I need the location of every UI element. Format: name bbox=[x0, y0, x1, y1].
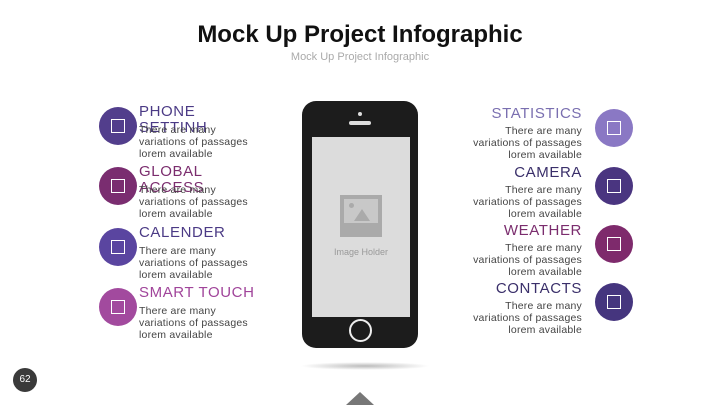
heading: CALENDER bbox=[139, 224, 226, 241]
text bbox=[473, 300, 582, 336]
text bbox=[473, 242, 582, 278]
icon: circle bbox=[595, 225, 633, 263]
text: lorem available bbox=[139, 269, 213, 281]
speaker bbox=[349, 121, 371, 125]
text: There are many bbox=[505, 125, 582, 137]
text bbox=[473, 125, 582, 161]
phone shadow bbox=[300, 362, 430, 370]
text: lorem available bbox=[139, 208, 213, 220]
text: variations of passages bbox=[473, 312, 582, 324]
item: global access bbox=[99, 163, 248, 220]
heading: SMART TOUCH bbox=[139, 284, 255, 301]
text: There are many bbox=[505, 300, 582, 312]
text: lorem available bbox=[508, 149, 582, 161]
icon: circle bbox=[595, 109, 633, 147]
item: camera bbox=[473, 164, 633, 220]
text: There are many bbox=[139, 124, 216, 136]
item: statistics bbox=[473, 105, 633, 161]
item: contacts bbox=[473, 280, 633, 336]
text: lorem available bbox=[508, 266, 582, 278]
heading: STATISTICS bbox=[492, 105, 582, 122]
text: There are many bbox=[139, 305, 216, 317]
text: variations of passages bbox=[473, 137, 582, 149]
text: There are many bbox=[139, 245, 216, 257]
text: variations of passages bbox=[139, 196, 248, 208]
icon: circle bbox=[595, 167, 633, 205]
text bbox=[139, 245, 248, 281]
text: variations of passages bbox=[473, 254, 582, 266]
text: There are many bbox=[505, 242, 582, 254]
text bbox=[473, 184, 582, 220]
text: lorem available bbox=[139, 148, 213, 160]
text: variations of passages bbox=[473, 196, 582, 208]
page number: 62 bbox=[19, 374, 31, 385]
text: lorem available bbox=[508, 208, 582, 220]
text bbox=[139, 184, 248, 220]
icon: circle bbox=[99, 228, 137, 266]
text: variations of passages bbox=[139, 136, 248, 148]
home button bbox=[349, 319, 372, 342]
text: There are many bbox=[139, 184, 216, 196]
bottom arrow bbox=[346, 392, 374, 405]
page number bbox=[13, 368, 37, 392]
subtitle: Mock Up Project Infographic bbox=[291, 51, 429, 63]
phone mockup bbox=[302, 101, 418, 348]
heading: GLOBAL ACCESS bbox=[139, 163, 204, 196]
text bbox=[139, 124, 248, 160]
item: phone setting bbox=[99, 103, 248, 160]
heading: CONTACTS bbox=[496, 280, 582, 297]
icon: circle bbox=[99, 167, 137, 205]
heading: WEATHER bbox=[504, 222, 582, 239]
heading: CAMERA bbox=[514, 164, 582, 181]
text: variations of passages bbox=[139, 257, 248, 269]
icon: circle bbox=[99, 107, 137, 145]
icon: image placeholder bbox=[340, 195, 382, 237]
item: weather bbox=[473, 222, 633, 278]
icon: circle bbox=[99, 288, 137, 326]
text: variations of passages bbox=[139, 317, 248, 329]
text bbox=[139, 305, 248, 341]
item: smart touch bbox=[99, 284, 255, 341]
placeholder label: Image Holder bbox=[334, 247, 388, 257]
title: Mock Up Project Infographic bbox=[197, 21, 523, 48]
text: lorem available bbox=[139, 329, 213, 341]
icon: circle bbox=[595, 283, 633, 321]
text: lorem available bbox=[508, 324, 582, 336]
text: There are many bbox=[505, 184, 582, 196]
heading: PHONE SETTINH bbox=[139, 103, 207, 136]
camera dot bbox=[358, 112, 362, 116]
item: calender bbox=[99, 224, 248, 281]
screen bbox=[312, 137, 410, 317]
